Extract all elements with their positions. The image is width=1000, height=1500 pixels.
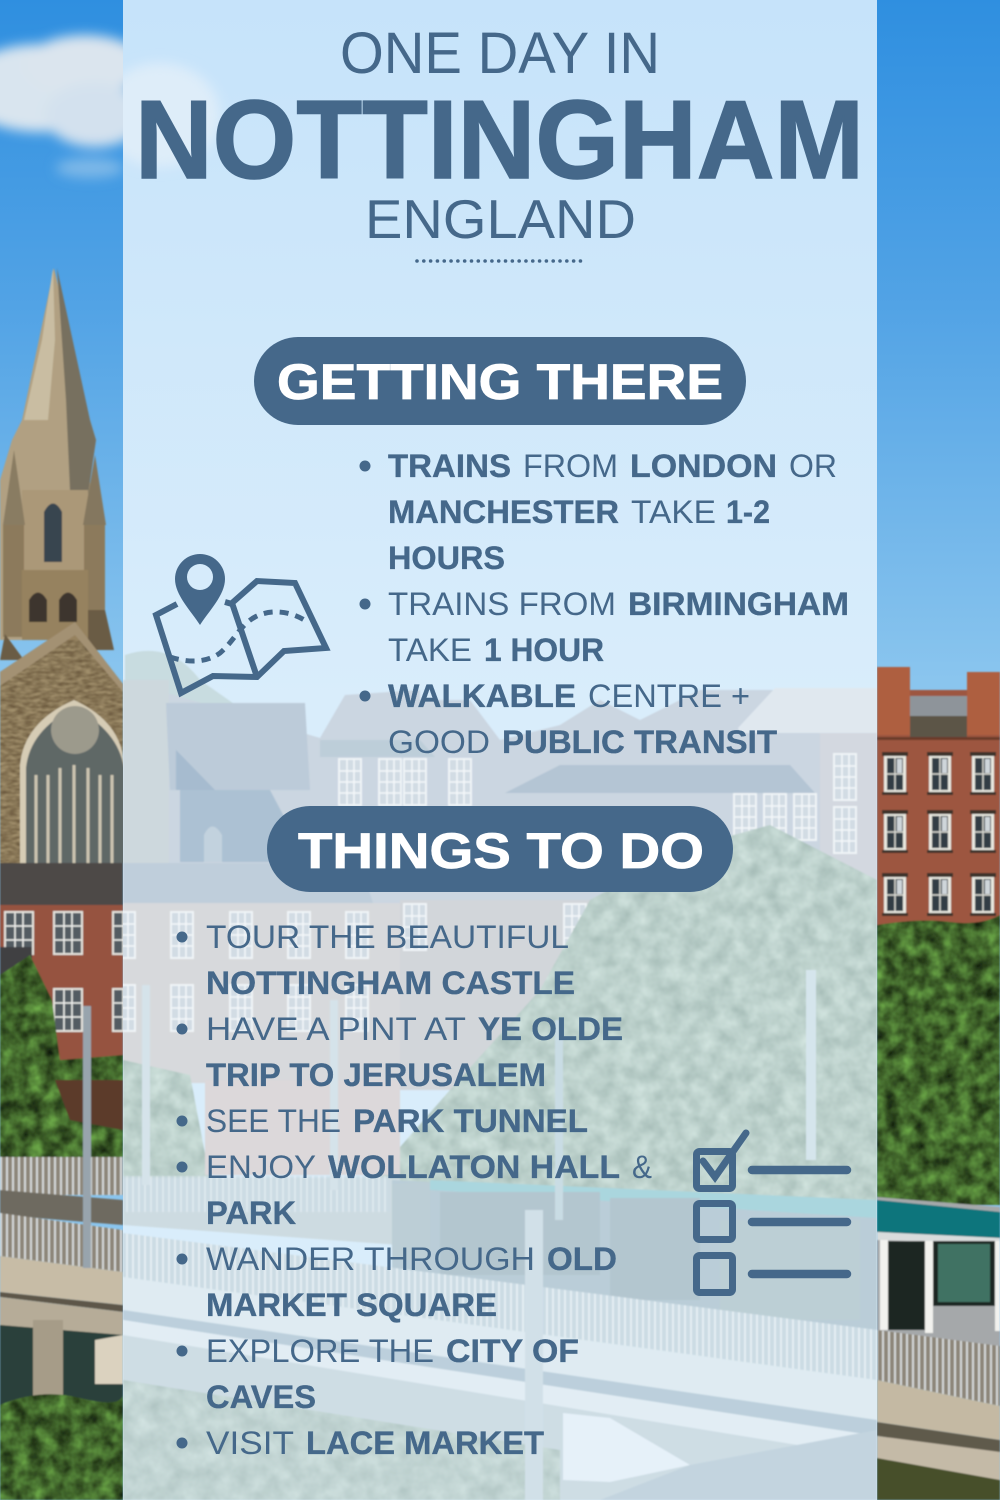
list item: trains from Birmingham: TAKE	[388, 632, 472, 668]
icon: checklist	[696, 1133, 847, 1292]
section heading: Getting There: GETTING THERE	[277, 354, 723, 410]
list item: Lace Market: VISIT	[206, 1425, 294, 1461]
list item: Nottingham Castle	[176, 925, 574, 994]
list item: trains from Birmingham: BIRMINGHAM	[628, 586, 849, 622]
list item: Old Market Square: MARKET SQUARE	[206, 1287, 497, 1323]
list item: City of Caves	[176, 1339, 578, 1408]
list item: trains from London or Manchester	[360, 454, 836, 570]
list item: City of Caves: CAVES	[206, 1379, 316, 1415]
icon: map with location pin	[156, 554, 326, 693]
list: getting there	[360, 448, 849, 760]
list item: trains from London or Manchester: LONDON	[630, 448, 777, 484]
list item: Park Tunnel	[176, 1109, 588, 1132]
list item: Ye Olde Trip: YE OLDE	[478, 1011, 623, 1047]
right trees	[877, 915, 1000, 1205]
list item: Old Market Square: OLD	[547, 1241, 617, 1277]
slate roof and brick mill	[0, 863, 142, 1065]
list item: trains from London or Manchester: TAKE	[631, 494, 716, 530]
section heading: Getting There	[254, 337, 746, 425]
washed distant buildings	[123, 651, 877, 925]
list item: Lace Market	[176, 1431, 544, 1454]
list item: trains from London or Manchester: 1-2	[726, 494, 770, 530]
list item: Wollaton Hall: ENJOY	[206, 1149, 316, 1185]
red-brick building at right	[877, 667, 1000, 925]
washed road and fence	[123, 1176, 400, 1245]
stone church wall	[0, 622, 123, 870]
list item: walkable centre: CENTRE +	[588, 678, 750, 714]
tram at right	[877, 1197, 1000, 1350]
list item: walkable centre: GOOD	[388, 724, 490, 760]
list item: trains from London or Manchester: MANCHESTER	[388, 494, 619, 530]
list item: walkable centre	[360, 684, 777, 754]
list item: Wollaton Hall: PARK	[206, 1195, 296, 1231]
list item: Ye Olde Trip: TRIP TO JERUSALEM	[206, 1057, 546, 1093]
list item: trains from Birmingham: TRAINS FROM	[388, 586, 616, 622]
washed tram	[392, 1180, 877, 1330]
list item: Ye Olde Trip: HAVE A PINT AT	[206, 1011, 466, 1047]
list item: walkable centre: PUBLIC TRANSIT	[502, 724, 777, 760]
list item: trains from Birmingham	[360, 592, 847, 662]
list item: trains from Birmingham: 1 HOUR	[484, 632, 604, 668]
cloud	[0, 35, 145, 178]
list item: Nottingham Castle: TOUR THE BEAUTIFUL	[206, 919, 569, 955]
list item: trains from London or Manchester: HOURS	[388, 540, 505, 576]
section heading: Things To Do	[267, 806, 733, 892]
list item: Wollaton Hall: &	[632, 1149, 652, 1185]
washed mill	[112, 863, 600, 1090]
title line: ENGLAND: ENGLAND	[365, 188, 636, 250]
title line: NOTTINGHAM: NOTTINGHAM	[135, 78, 864, 202]
list item: City of Caves: EXPLORE THE	[206, 1333, 434, 1369]
list item: City of Caves: CITY OF	[446, 1333, 579, 1369]
list item: Wollaton Hall	[176, 1155, 652, 1224]
title line: ONE DAY IN: ONE DAY IN	[340, 21, 660, 86]
list item: Park Tunnel: SEE THE	[206, 1103, 341, 1139]
list item: Lace Market: LACE MARKET	[306, 1425, 544, 1461]
list item: walkable centre: WALKABLE	[388, 678, 576, 714]
left trees	[0, 955, 123, 1170]
list item: Old Market Square: WANDER THROUGH	[206, 1241, 535, 1277]
list item: trains from London or Manchester: OR	[789, 448, 837, 484]
church spire and tower	[0, 268, 124, 863]
section heading: Things To Do: THINGS TO DO	[298, 823, 704, 879]
translucent centre panel with washed-out scene	[100, 0, 877, 1500]
list item: trains from London or Manchester: FROM	[523, 448, 618, 484]
list item: Old Market Square	[176, 1241, 617, 1323]
list item: Wollaton Hall: WOLLATON HALL	[328, 1149, 620, 1185]
washed bridge	[123, 970, 877, 1500]
upper road and railing left	[0, 1157, 123, 1225]
list item: Ye Olde Trip	[176, 1017, 622, 1086]
list item: trains from London or Manchester: TRAINS	[388, 448, 511, 484]
washed trees	[380, 825, 877, 1210]
list item: Park Tunnel: PARK TUNNEL	[353, 1103, 588, 1139]
title	[141, 32, 858, 238]
list item: Nottingham Castle: NOTTINGHAM CASTLE	[206, 965, 575, 1001]
list: things to do	[176, 919, 652, 1461]
bridge deck and railing	[0, 1006, 1000, 1500]
